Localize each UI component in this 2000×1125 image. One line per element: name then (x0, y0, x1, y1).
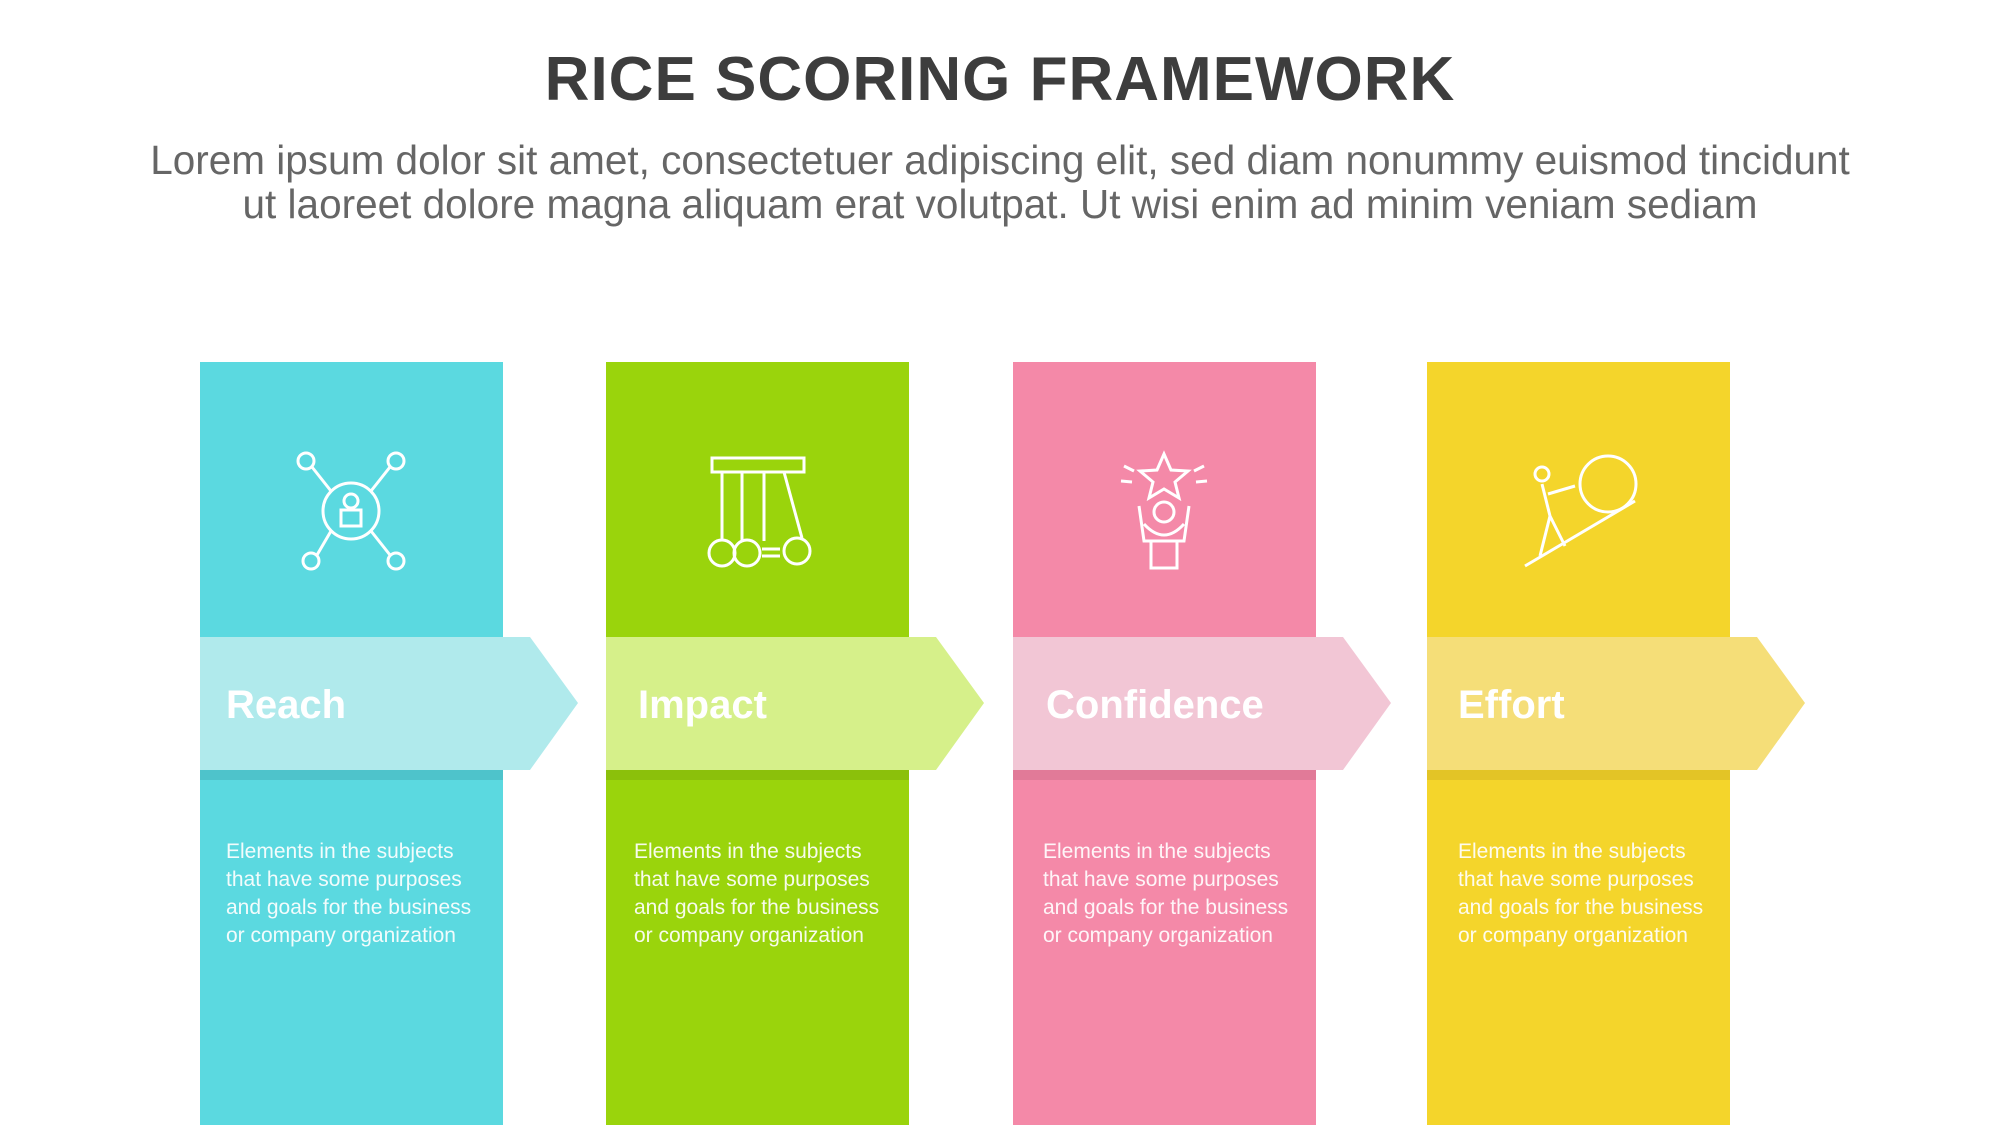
text: impact: Elements in the subjects that have some purposes and goals for the business or company organization (634, 840, 879, 947)
panel: effort (1427, 362, 1730, 1125)
subtitle: ut laoreet dolore magna aliquam erat volutpat. Ut wisi enim ad minim veniam sediam (243, 181, 1757, 227)
label: Reach: Reach (226, 683, 346, 727)
icon: sisyphus (1524, 454, 1638, 568)
stripes (200, 770, 1730, 780)
panel: reach (200, 362, 503, 1125)
label: Confidence: Confidence (1046, 683, 1264, 727)
icon: star person (1120, 450, 1208, 570)
panel: impact (606, 362, 909, 1125)
icon: network (296, 452, 406, 570)
icon: newton cradle (708, 456, 812, 568)
title: RICE SCORING FRAMEWORK (545, 45, 1455, 114)
subtitle: Lorem ipsum dolor sit amet, consectetuer adipiscing elit, sed diam nonummy euismod tincidunt (150, 137, 1850, 183)
label: Effort: Effort (1458, 683, 1565, 727)
panel: confidence (1013, 362, 1316, 1125)
text: reach: Elements in the subjects that have some purposes and goals for the business or company organization (226, 840, 471, 947)
label: Impact: Impact (638, 683, 767, 727)
subtitle (150, 137, 1850, 227)
text: confidence: Elements in the subjects that have some purposes and goals for the business or company organization (1043, 840, 1288, 947)
text: effort: Elements in the subjects that have some purposes and goals for the business or company organization (1458, 840, 1703, 947)
